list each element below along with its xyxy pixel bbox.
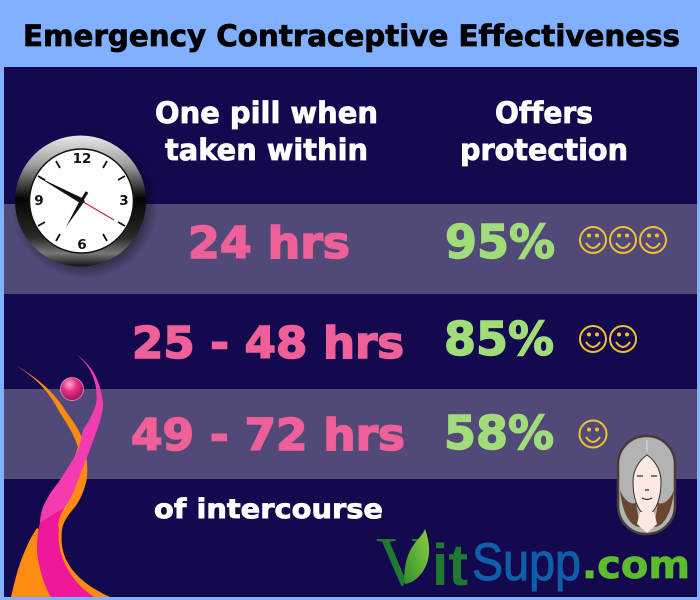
row 3: 49 - 72 hrs: 49 - 72 hrs xyxy=(131,410,405,461)
leaf xyxy=(405,529,429,584)
logo letters Supp: Supp xyxy=(472,533,581,592)
pink ribbon upper xyxy=(40,354,103,523)
icon: wall clock: 9 xyxy=(34,193,44,209)
logo letters it: it xyxy=(432,533,468,598)
ball xyxy=(60,378,84,400)
pink ribbon lower xyxy=(37,507,94,597)
column heading: one pill when taken within xyxy=(155,96,378,167)
row 1: 95%: 95% xyxy=(445,215,555,269)
icon: wall clock: 12 xyxy=(73,151,91,167)
icon: wall clock xyxy=(12,133,158,279)
row 2: 25 - 48 hrs: 25 - 48 hrs xyxy=(132,318,404,369)
title: Emergency Contraceptive Effectiveness xyxy=(23,19,680,53)
band: 49-72 hrs row xyxy=(4,389,697,479)
icon: one smiley xyxy=(580,420,606,448)
band: 24 hrs row xyxy=(4,204,697,294)
icon: two smileys xyxy=(580,326,636,352)
column heading: offers protection: protection xyxy=(460,133,628,167)
icon: wall clock: 3 xyxy=(119,193,129,209)
logo letters .com: .com xyxy=(582,543,690,587)
row 2: 85%: 85% xyxy=(444,312,554,366)
row 3: 58%: 58% xyxy=(444,406,554,460)
column heading: one pill when taken within: taken within xyxy=(165,133,368,167)
icon: three smileys xyxy=(580,227,666,253)
column heading: offers protection xyxy=(460,96,628,167)
logo swoosh: orange and pink ribbons with ball xyxy=(11,354,110,597)
icon: wall clock: 6 xyxy=(77,237,87,253)
icon: woman face xyxy=(618,436,675,534)
logo: VitSupp.com xyxy=(376,524,690,600)
orange ribbon main xyxy=(15,365,110,597)
footer text: of intercourse: of intercourse xyxy=(154,494,383,525)
logo letter V: V xyxy=(376,524,428,600)
row 1: 24 hrs: 24 hrs xyxy=(188,218,350,269)
column heading: offers protection: Offers xyxy=(495,96,593,130)
clock hands xyxy=(38,177,82,203)
orange ribbon left foot xyxy=(11,528,55,597)
column heading: one pill when taken within: One pill when xyxy=(155,96,378,130)
